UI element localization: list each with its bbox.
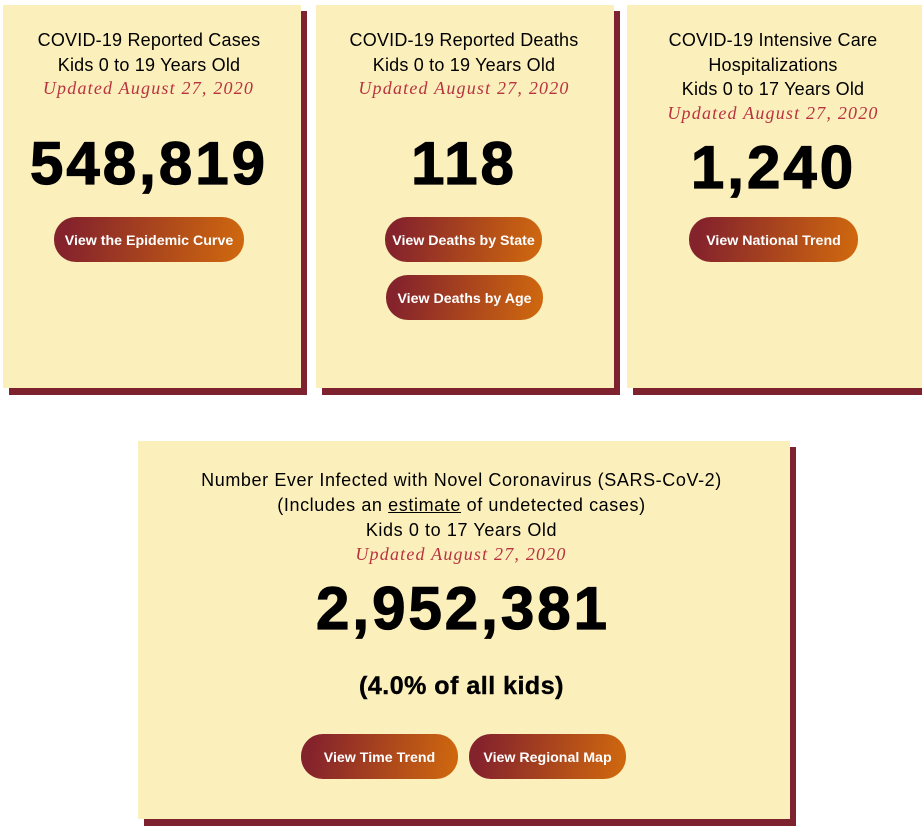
update date: ever infected: Updated August 27, 2020 <box>355 544 567 564</box>
heading: reported deaths <box>350 30 578 74</box>
button: epidemic curve: View the Epidemic Curve <box>65 233 233 249</box>
update date: reported deaths: Updated August 27, 2020 <box>358 78 570 98</box>
number: reported deaths: 118 <box>411 130 517 197</box>
button: time trend <box>301 734 458 779</box>
heading: intensive care: COVID-19 Intensive Care <box>669 30 877 50</box>
panel: reported deaths <box>316 5 620 395</box>
panel: intensive care hospitalizations <box>627 5 922 395</box>
heading: ever infected: Kids 0 to 17 Years Old <box>366 520 557 540</box>
number: ever infected: 2,952,381 <box>316 575 610 642</box>
heading: reported deaths: Kids 0 to 19 Years Old <box>373 54 555 74</box>
button: national trend: View National Trend <box>706 233 841 249</box>
number: intensive care: 1,240 <box>691 134 856 201</box>
panel: reported cases <box>3 5 307 395</box>
update date: reported cases: Updated August 27, 2020 <box>43 78 254 98</box>
button: epidemic curve <box>54 217 244 262</box>
heading: reported cases: Kids 0 to 19 Years Old <box>58 54 240 74</box>
heading: ever infected: Number Ever Infected with Novel Coronavirus (SARS-CoV-2) <box>201 470 722 490</box>
button: national trend <box>689 217 858 262</box>
button: regional map <box>469 734 626 779</box>
button: regional map: View Regional Map <box>483 750 612 766</box>
button: time trend: View Time Trend <box>324 750 435 766</box>
heading: intensive care: Hospitalizations <box>708 54 838 74</box>
button: deaths by state: View Deaths by State <box>392 233 535 249</box>
percent of all kids: (4.0% of all kids) <box>359 672 564 700</box>
heading: ever infected <box>201 470 722 540</box>
button: deaths by state <box>385 217 542 262</box>
panel: ever infected <box>138 441 796 826</box>
button: deaths by age <box>386 275 543 320</box>
heading: intensive care: Kids 0 to 17 Years Old <box>682 79 864 99</box>
heading: reported cases: COVID-19 Reported Cases <box>38 30 260 50</box>
number: reported cases: 548,819 <box>30 130 268 197</box>
heading: ever infected: (Includes an estimate of undetected cases) <box>277 495 646 515</box>
button: deaths by age: View Deaths by Age <box>397 291 532 307</box>
heading: reported cases <box>38 30 260 74</box>
heading: intensive care <box>669 30 877 99</box>
update date: intensive care: Updated August 27, 2020 <box>667 103 879 123</box>
heading: reported deaths: COVID-19 Reported Deaths <box>350 30 578 50</box>
